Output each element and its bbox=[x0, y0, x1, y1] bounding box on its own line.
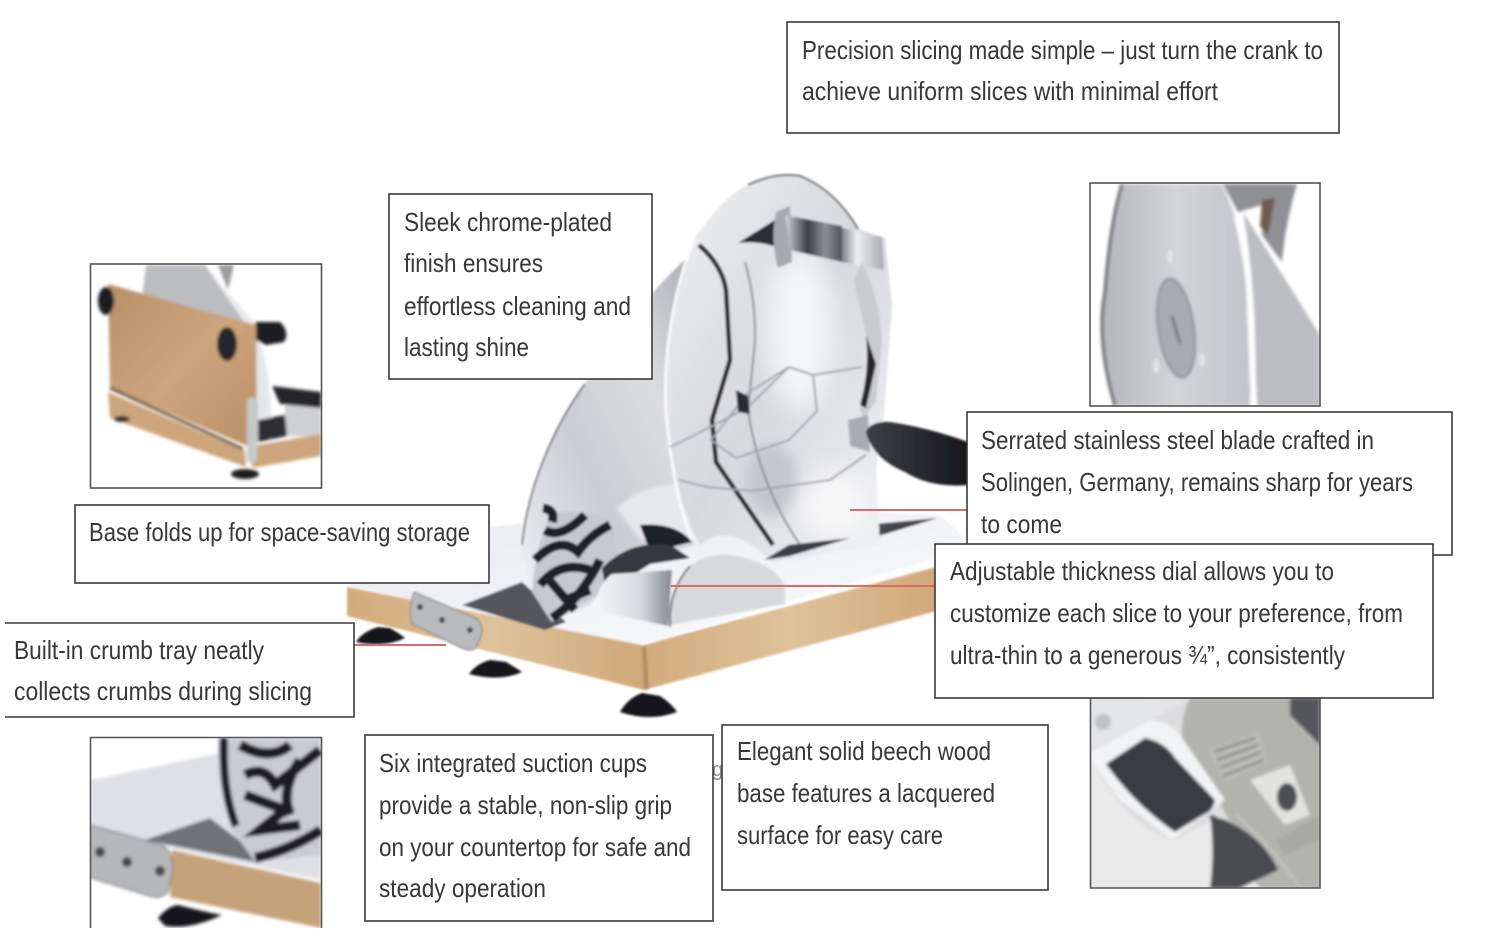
callout: thickness dial: ultra-thin to a generous ¾”, consistently bbox=[950, 640, 1345, 670]
reflective dark chrome at carriage base bbox=[532, 508, 692, 622]
inset photo: folded base bbox=[91, 265, 321, 487]
thickness dial cylinder and crescent bbox=[593, 554, 785, 627]
dark crumb tray strips bbox=[462, 518, 938, 630]
stray character behind callout: g bbox=[712, 759, 723, 781]
leader line: blade bbox=[850, 509, 968, 511]
callout: chrome-plated finish: lasting shine bbox=[404, 332, 529, 362]
callout: precision slicing: achieve uniform slices with minimal effort bbox=[802, 76, 1219, 106]
black crank handle bbox=[848, 415, 968, 485]
callout: beech wood base bbox=[722, 725, 1048, 890]
callout: precision slicing bbox=[787, 22, 1339, 133]
wooden base bbox=[347, 566, 940, 690]
inset photo: thickness dial close-up bbox=[1090, 698, 1320, 888]
inset frame: crumb tray close-up bbox=[90, 738, 322, 928]
chrome top plate bbox=[347, 505, 975, 645]
callout: base folds up: Base folds up for space-saving storage bbox=[89, 517, 470, 547]
chrome carriage body and crank bbox=[666, 175, 892, 562]
callout: suction cups: steady operation bbox=[379, 873, 546, 903]
callout: suction cups bbox=[365, 735, 713, 921]
callout: chrome-plated finish: effortless cleaning and bbox=[404, 291, 631, 321]
callout: thickness dial: customize each slice to your preference, from bbox=[950, 598, 1403, 628]
inset frame: serrated blade close-up bbox=[1090, 183, 1320, 406]
suction cup feet bbox=[356, 627, 677, 717]
callout: crumb tray bbox=[5, 623, 354, 717]
callout: beech wood base: base features a lacquered bbox=[737, 778, 995, 808]
metal hinge plate bbox=[410, 592, 482, 650]
callout: crumb tray: collects crumbs during slicing bbox=[14, 676, 312, 706]
inset frame: thickness dial close-up bbox=[1090, 698, 1320, 888]
callout: chrome-plated finish bbox=[389, 194, 652, 379]
callout: suction cups: provide a stable, non-slip grip bbox=[379, 790, 672, 820]
callout: serrated blade bbox=[967, 412, 1452, 555]
callout: thickness dial bbox=[935, 544, 1433, 698]
chrome front guard bbox=[522, 256, 695, 622]
callout: chrome-plated finish: finish ensures bbox=[404, 248, 543, 278]
callout: serrated blade: to come bbox=[981, 509, 1062, 539]
callout: suction cups: Six integrated suction cups bbox=[379, 748, 647, 778]
callout: suction cups: on your countertop for safe and bbox=[379, 832, 691, 862]
callout: serrated blade: Solingen, Germany, remains sharp for years bbox=[981, 467, 1413, 497]
callout: serrated blade: Serrated stainless steel blade crafted in bbox=[981, 425, 1374, 455]
inset frame: folded base bbox=[90, 264, 322, 488]
callout: precision slicing: Precision slicing made simple – just turn the crank to bbox=[802, 35, 1323, 65]
product illustration: bread slicer bbox=[347, 175, 975, 717]
leader line: thickness dial bbox=[671, 585, 936, 587]
callout: thickness dial: Adjustable thickness dial allows you to bbox=[950, 556, 1334, 586]
callout: crumb tray: Built-in crumb tray neatly bbox=[14, 635, 264, 665]
callout: beech wood base: Elegant solid beech wood bbox=[737, 736, 991, 766]
callout: base folds up bbox=[75, 505, 489, 583]
inset photo: crumb tray close-up bbox=[91, 738, 321, 928]
callout: chrome-plated finish: Sleek chrome-plated bbox=[404, 207, 612, 237]
leader line: crumb tray bbox=[354, 644, 446, 646]
callout: beech wood base: surface for easy care bbox=[737, 820, 943, 850]
inset photo: serrated blade close-up bbox=[1090, 184, 1320, 406]
